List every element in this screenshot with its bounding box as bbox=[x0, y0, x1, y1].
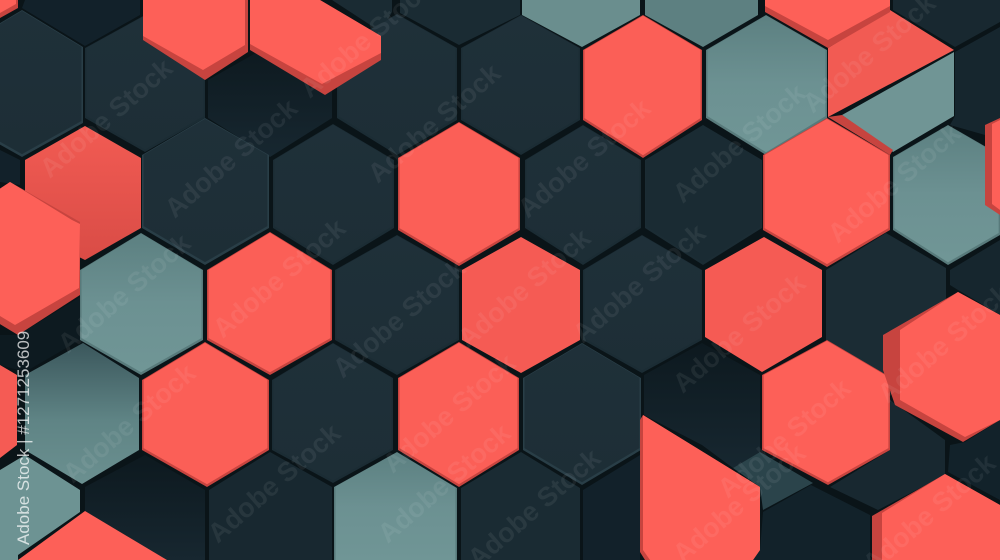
raised coral hexagon: top left corner bbox=[0, 0, 18, 18]
raised coral hexagon: lower right bbox=[762, 340, 890, 485]
watermark text: Adobe Stock bbox=[452, 222, 597, 354]
watermark text: Adobe Stock bbox=[377, 347, 522, 479]
watermark text: Adobe Stock bbox=[159, 92, 304, 224]
top edge dark hexagons bbox=[22, 0, 1000, 47]
split coral and teal hexagon bbox=[828, 10, 954, 155]
watermark text: Adobe Stock bbox=[567, 217, 712, 349]
teal top hexagons bbox=[522, 0, 758, 47]
raised coral shape: bottom centre bbox=[640, 415, 760, 560]
raised coral hexagon: left bbox=[0, 182, 80, 335]
raised coral hexagon: top left one bbox=[143, 0, 248, 80]
watermark text: Adobe Stock bbox=[667, 77, 812, 209]
raised coral hexagon: bottom right bbox=[872, 474, 1000, 560]
watermark text: Adobe Stock bbox=[362, 57, 507, 189]
watermark text: Adobe Stock bbox=[667, 267, 812, 399]
watermark text: Adobe Stock bbox=[512, 92, 657, 224]
watermark text: Adobe Stock bbox=[52, 227, 197, 359]
hexagon row 4 bbox=[0, 342, 760, 487]
hexagon row 1 bbox=[0, 10, 1000, 157]
coral hexagons row 2 bbox=[398, 15, 702, 266]
watermark text: Adobe Stock bbox=[207, 212, 352, 344]
watermark text: Adobe Stock bbox=[34, 52, 179, 184]
hexagon row 5 bbox=[0, 400, 1000, 560]
watermark text: Adobe Stock bbox=[202, 417, 347, 549]
raised coral hexagon: bottom left bbox=[18, 511, 167, 560]
raised coral hexagon: centre right bbox=[763, 118, 890, 267]
hexagon row 2 bbox=[0, 118, 1000, 265]
watermark text: Adobe Stock bbox=[57, 357, 202, 489]
watermark text: Adobe Stock bbox=[327, 252, 472, 384]
vertical stock ID label: Adobe Stock | #1271253609 bbox=[14, 331, 33, 545]
watermark text: Adobe Stock bbox=[372, 417, 517, 549]
raised coral hexagon: right edge bbox=[985, 118, 1000, 215]
hexagon row 3 bbox=[0, 232, 1000, 375]
watermark text: Adobe Stock bbox=[712, 372, 857, 504]
raised coral hexagon: top left two bbox=[250, 0, 381, 95]
raised coral hexagon: top right bbox=[765, 0, 890, 48]
watermark text: Adobe Stock bbox=[822, 117, 967, 249]
raised coral hexagon: far right bbox=[883, 292, 1000, 442]
